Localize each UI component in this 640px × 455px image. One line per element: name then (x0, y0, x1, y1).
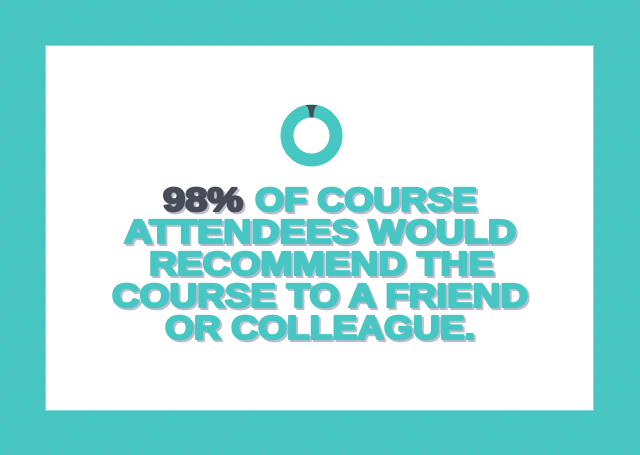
line 1: 98%: 98% (163, 181, 243, 218)
line 5: or colleague.: OR COLLEAGUE. (165, 309, 475, 346)
line 5 shadow: OR COLLEAGUE. (167, 311, 477, 348)
line 1 shadow: 98% (165, 183, 245, 220)
line 2 shadow: ATTENDEES WOULD (126, 215, 518, 252)
line 4: course to a friend: COURSE TO A FRIEND (112, 277, 528, 314)
line 2: attendees would: ATTENDEES WOULD (124, 213, 516, 250)
line 4 shadow: COURSE TO A FRIEND (114, 279, 530, 316)
line 3: recommend the: RECOMMEND THE (149, 245, 494, 282)
donut chart: 98% (287, 105, 336, 160)
line 3 shadow: RECOMMEND THE (151, 247, 496, 284)
white panel (46, 46, 594, 410)
line 1: of course: OF COURSE (255, 181, 477, 218)
headline statistic text (112, 181, 530, 348)
line 1 shadow, remainder: OF COURSE (257, 183, 479, 220)
